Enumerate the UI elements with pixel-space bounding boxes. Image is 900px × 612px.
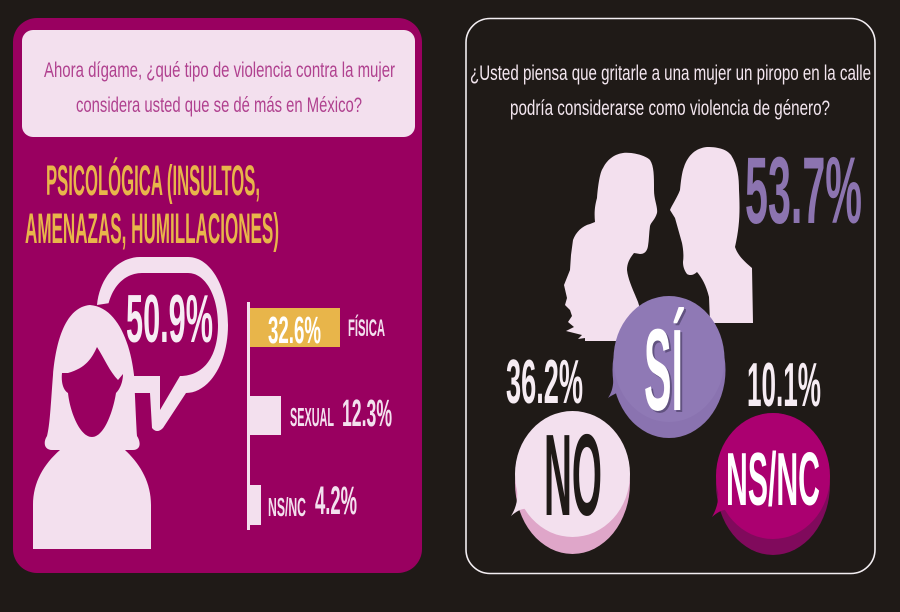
heading: psicológica — [25, 156, 279, 253]
panel outline — [466, 18, 875, 574]
bar: ns/nc: NS/NC — [268, 492, 306, 522]
bubble: sí — [608, 296, 726, 438]
panel: piropo en la calle — [466, 18, 875, 574]
bar: sexual — [250, 393, 392, 435]
bar: física: 32.6% — [268, 310, 321, 352]
question text — [470, 62, 871, 120]
panel: tipo de violencia: 12.3% — [342, 393, 392, 435]
icon: woman silhouette — [33, 305, 151, 549]
bubble: sí: SÍ — [646, 307, 686, 437]
question box: Ahora dígame, ¿qué tipo de violencia contra la mujer — [44, 59, 395, 82]
bar axis — [247, 302, 250, 530]
panel: piropo en la calle: NO — [544, 410, 602, 540]
panel: tipo de violencia: AMENAZAS, HUMILLACIONES) — [25, 205, 279, 253]
question box — [22, 30, 415, 137]
bubble: ns/nc — [712, 413, 830, 555]
panel: tipo de violencia: 50.9% — [126, 281, 213, 357]
panel: tipo de violencia — [13, 18, 422, 573]
bubble: no — [511, 410, 630, 554]
icon: speech bubble — [97, 257, 228, 431]
panel: piropo en la calle: 36.2% — [506, 348, 583, 417]
bar: ns/nc — [250, 479, 357, 525]
bar: sexual: SEXUAL — [290, 402, 334, 432]
panel: tipo de violencia: PSICOLÓGICA (INSULTOS, — [46, 156, 260, 205]
bar chart: otros tipos: FÍSICA — [348, 314, 385, 342]
bar chart: otros tipos: 4.2% — [315, 479, 357, 523]
panel background — [13, 18, 422, 573]
icon: woman and man silhouettes — [564, 147, 753, 341]
question box: considera usted que se dé más en México? — [76, 94, 362, 117]
bubble: sí: SÍ — [644, 305, 684, 435]
bar chart: otros tipos — [247, 302, 392, 530]
